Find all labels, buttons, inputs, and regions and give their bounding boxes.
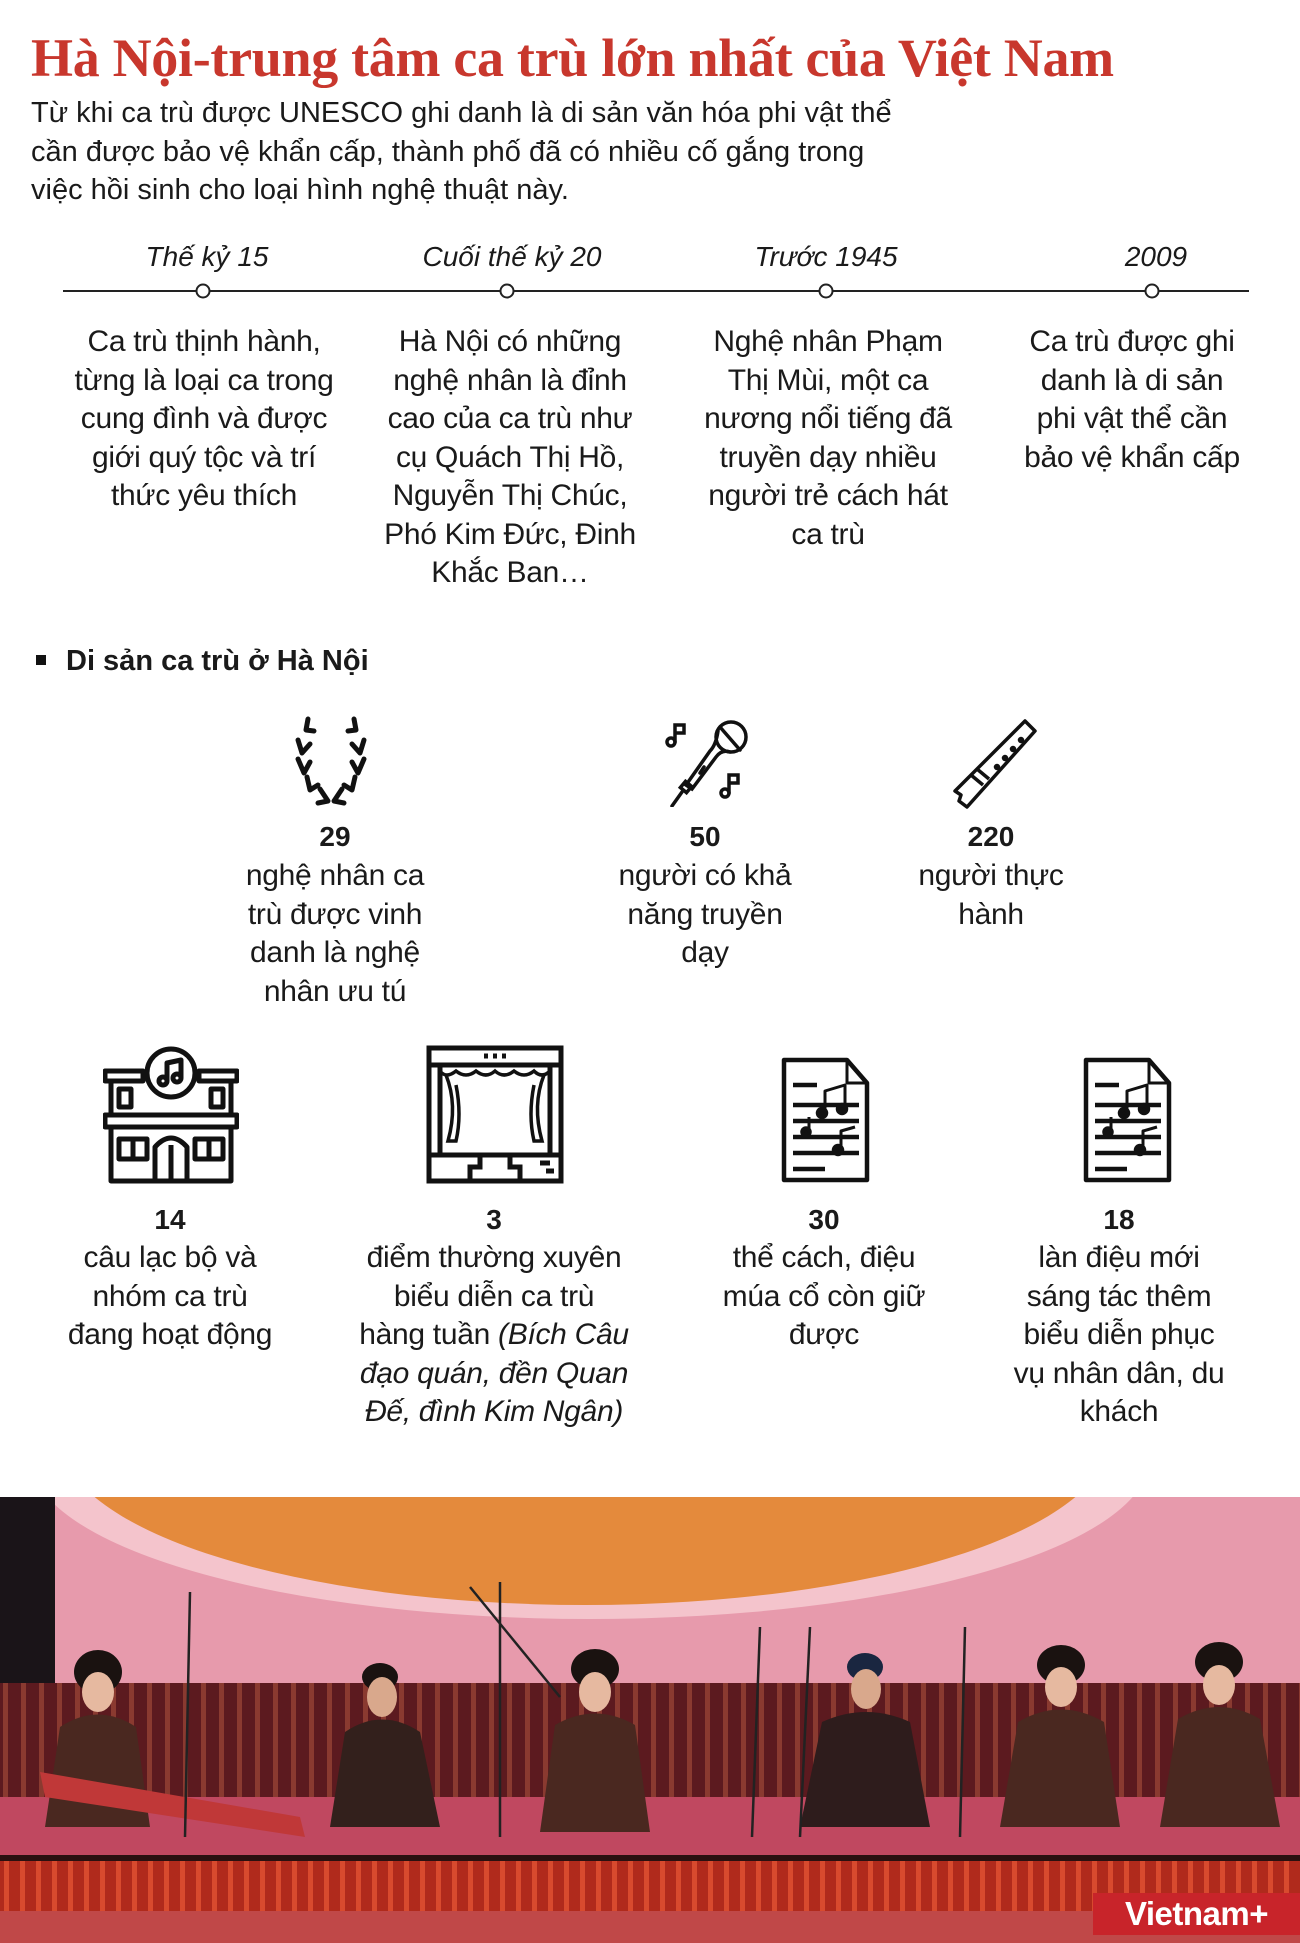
timeline text 2: Hà Nội có những: [399, 325, 621, 358]
timeline: [63, 241, 1249, 589]
title: Hà Nội-trung tâm ca trù lớn nhất của Việt Nam: [31, 28, 1114, 88]
timeline text 1: [74, 325, 333, 512]
label: người có khả: [619, 859, 791, 892]
timeline label: Trước 1945: Trước 1945: [754, 241, 898, 272]
timeline label: Cuối thế kỷ 20: Cuối thế kỷ 20: [422, 241, 602, 272]
icon: laurel wreath: [296, 716, 366, 806]
timeline text 4: danh là di sản: [1041, 364, 1223, 396]
number: 18: [1103, 1204, 1135, 1235]
stat: 30: [723, 1058, 925, 1351]
number: 50: [689, 821, 721, 852]
performers: [45, 1642, 1280, 1832]
timeline text 3: truyền dạy nhiều: [719, 440, 937, 474]
timeline text 3: người trẻ cách hát: [708, 479, 948, 512]
number: 220: [968, 821, 1014, 852]
timeline text 1: giới quý tộc và trí: [92, 440, 316, 474]
number: 14: [154, 1204, 186, 1235]
icon: music club building: [103, 1046, 239, 1184]
label: [246, 859, 424, 1008]
timeline label: Thế kỷ 15: Thế kỷ 15: [146, 241, 268, 272]
timeline text 2: cao của ca trù như: [388, 402, 632, 435]
label: [619, 859, 792, 969]
timeline text 1: cung đình và được: [81, 402, 327, 435]
stat: 220: [918, 719, 1064, 930]
label: trù được vinh: [248, 898, 422, 930]
stat: 50: [619, 720, 792, 969]
stat: 29: [246, 716, 424, 1008]
section heading: Di sản ca trù ở Hà Nội: [66, 645, 369, 677]
icon: music sheet: [782, 1058, 870, 1182]
timeline text 1: từng là loại ca trong: [75, 364, 333, 396]
label: [68, 1241, 272, 1351]
timeline text 2: Phó Kim Đức, Đinh: [384, 518, 636, 550]
label: hàng tuần (Bích Câu: [359, 1318, 629, 1351]
logo: Vietnam+: [1093, 1893, 1300, 1935]
label: điểm thường xuyên: [367, 1241, 621, 1274]
label: làn điệu mới: [1038, 1241, 1200, 1274]
label: Đế, đình Kim Ngân): [365, 1395, 623, 1428]
timeline text 3: ca trù: [791, 518, 865, 550]
label: người thực: [918, 859, 1064, 892]
timeline text 3: nương nổi tiếng đã: [704, 402, 952, 435]
label: sáng tác thêm: [1027, 1280, 1211, 1312]
timeline label: 2009: 2009: [1125, 241, 1187, 272]
timeline text 4: Ca trù được ghi: [1029, 325, 1235, 358]
instrument: dan day: [40, 1772, 305, 1837]
label: khách: [1080, 1395, 1158, 1428]
subtitle text: việc hồi sinh cho loại hình nghệ thuật này.: [31, 174, 569, 206]
label: được: [789, 1318, 859, 1351]
subtitle text: Từ khi ca trù được UNESCO ghi danh là di sản văn hóa phi vật thể: [31, 97, 892, 129]
icon: microphone with notes: [665, 720, 748, 807]
timeline text 2: Khắc Ban…: [431, 556, 589, 589]
label: danh là nghệ: [250, 936, 420, 969]
icon: theatre stage: [426, 1046, 564, 1184]
timeline text 2: nghệ nhân là đỉnh: [393, 364, 627, 396]
timeline text 3: Nghệ nhân Phạm: [713, 325, 943, 358]
label: biểu diễn phục: [1024, 1318, 1214, 1351]
stat: 14: [68, 1046, 272, 1351]
label: nhân ưu tú: [264, 974, 406, 1008]
number: 3: [486, 1204, 502, 1235]
label: nhóm ca trù: [92, 1280, 248, 1312]
timeline text 4: phi vật thể cần: [1037, 402, 1227, 435]
label: múa cổ còn giữ: [723, 1280, 925, 1312]
subtitle text: cần được bảo vệ khẩn cấp, thành phố đã có nhiều cố gắng trong: [31, 136, 864, 168]
label: thể cách, điệu: [733, 1241, 915, 1274]
label: [359, 1241, 629, 1428]
label: biểu diễn ca trù: [394, 1280, 594, 1312]
label: câu lạc bộ và: [84, 1241, 256, 1274]
label: đang hoạt động: [68, 1318, 272, 1351]
timeline text 4: bảo vệ khẩn cấp: [1024, 440, 1240, 474]
timeline text 1: thức yêu thích: [111, 479, 297, 512]
icon: flute: [953, 719, 1037, 809]
timeline text 2: cụ Quách Thị Hồ,: [396, 440, 624, 474]
timeline text 4: [1024, 325, 1240, 474]
label: [1014, 1241, 1224, 1428]
stat: 18: [1014, 1058, 1224, 1428]
label: đạo quán, đền Quan: [360, 1356, 628, 1390]
timeline text 2: [384, 325, 636, 589]
timeline axis: [63, 284, 1249, 298]
stage floor: [0, 1797, 1300, 1857]
stat: 3: [359, 1046, 629, 1428]
timeline text 3: Thị Mùi, một ca: [728, 364, 928, 396]
timeline text 1: Ca trù thịnh hành,: [87, 325, 321, 358]
timeline text 3: [704, 325, 952, 550]
number: 30: [808, 1204, 840, 1235]
label: [723, 1241, 925, 1351]
curtain: [0, 1683, 1300, 1803]
label: dạy: [681, 936, 729, 969]
label: năng truyền: [627, 898, 783, 930]
logo: Vietnam+: Vietnam+: [1125, 1895, 1268, 1932]
subtitle text: [31, 97, 892, 206]
timeline text 2: Nguyễn Thị Chúc,: [393, 479, 627, 512]
label: hành: [958, 898, 1024, 930]
icon: new music sheet: [1084, 1058, 1172, 1182]
photo: ca tru performance: [0, 1497, 1300, 1943]
number: 29: [319, 821, 351, 852]
label: [918, 859, 1064, 930]
label: vụ nhân dân, du: [1014, 1356, 1224, 1390]
label: nghệ nhân ca: [246, 859, 424, 892]
